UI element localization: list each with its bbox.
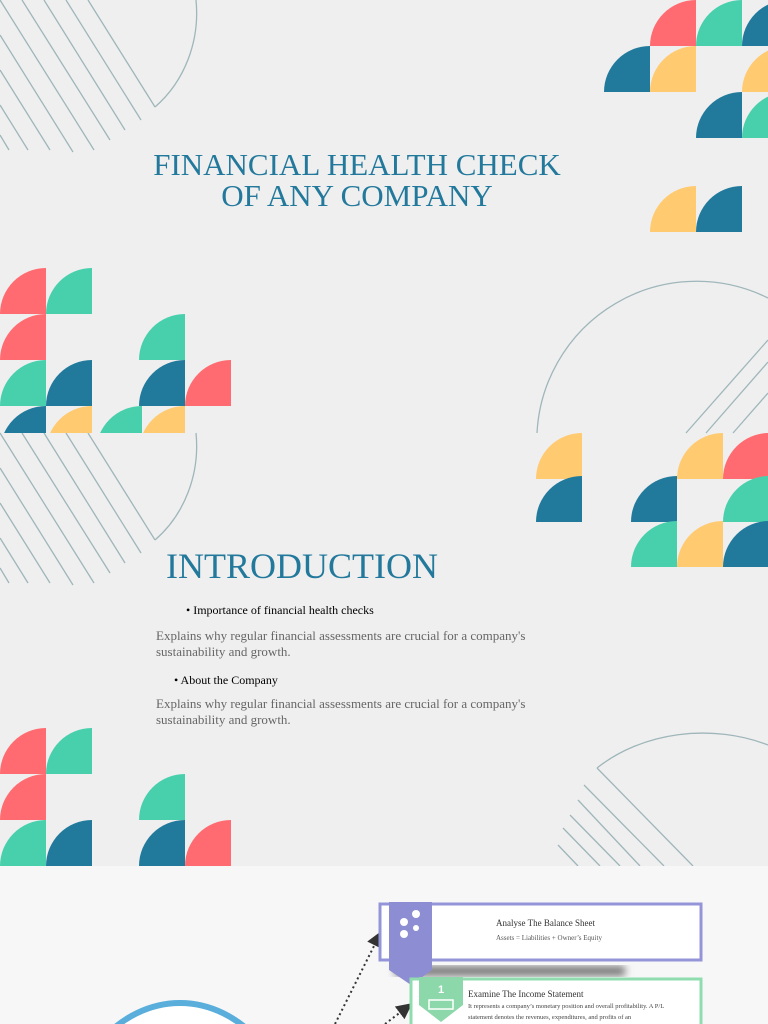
paragraph 1: Explains why regular financial assessments are crucial for a company's sustainability and growth.	[156, 628, 525, 659]
bottom diagram	[114, 902, 702, 1024]
arrows	[335, 938, 406, 1024]
title: OF ANY COMPANY	[221, 178, 493, 213]
intro text block	[156, 603, 525, 727]
box 2: It represents a company’s monetary position and overall profitability. A P/L	[468, 1003, 664, 1010]
bullet 1: • Importance of financial health checks	[186, 603, 374, 617]
box 2: Examine The Income Statement	[468, 989, 584, 999]
box 2: statement denotes the revenues, expenditures, and profits of an	[468, 1014, 632, 1021]
right arcs and lines	[537, 281, 768, 866]
top-right cluster	[604, 0, 768, 232]
title	[153, 147, 561, 213]
paragraph 2: Explains why regular financial assessments are crucial for a company's sustainability and growth.	[156, 696, 525, 727]
introduction heading: INTRODUCTION	[166, 546, 438, 586]
box 1: Assets = Liabilities + Owner’s Equity	[496, 934, 602, 942]
bullet 2: • About the Company	[174, 673, 278, 687]
slide 1 lines	[0, 0, 197, 152]
right clusters slide2	[536, 433, 768, 567]
box 2: 1	[438, 984, 444, 996]
bottom section background	[0, 866, 768, 1024]
slide 2 lines	[0, 433, 197, 585]
title: FINANCIAL HEALTH CHECK	[153, 147, 561, 182]
shadow	[395, 966, 625, 976]
circle	[62, 1003, 298, 1024]
box 2	[411, 977, 701, 1024]
box 1: Analyse The Balance Sheet	[496, 918, 596, 928]
left cluster slide2	[0, 728, 231, 866]
box 1	[380, 902, 701, 985]
left cluster slide1	[0, 268, 231, 452]
